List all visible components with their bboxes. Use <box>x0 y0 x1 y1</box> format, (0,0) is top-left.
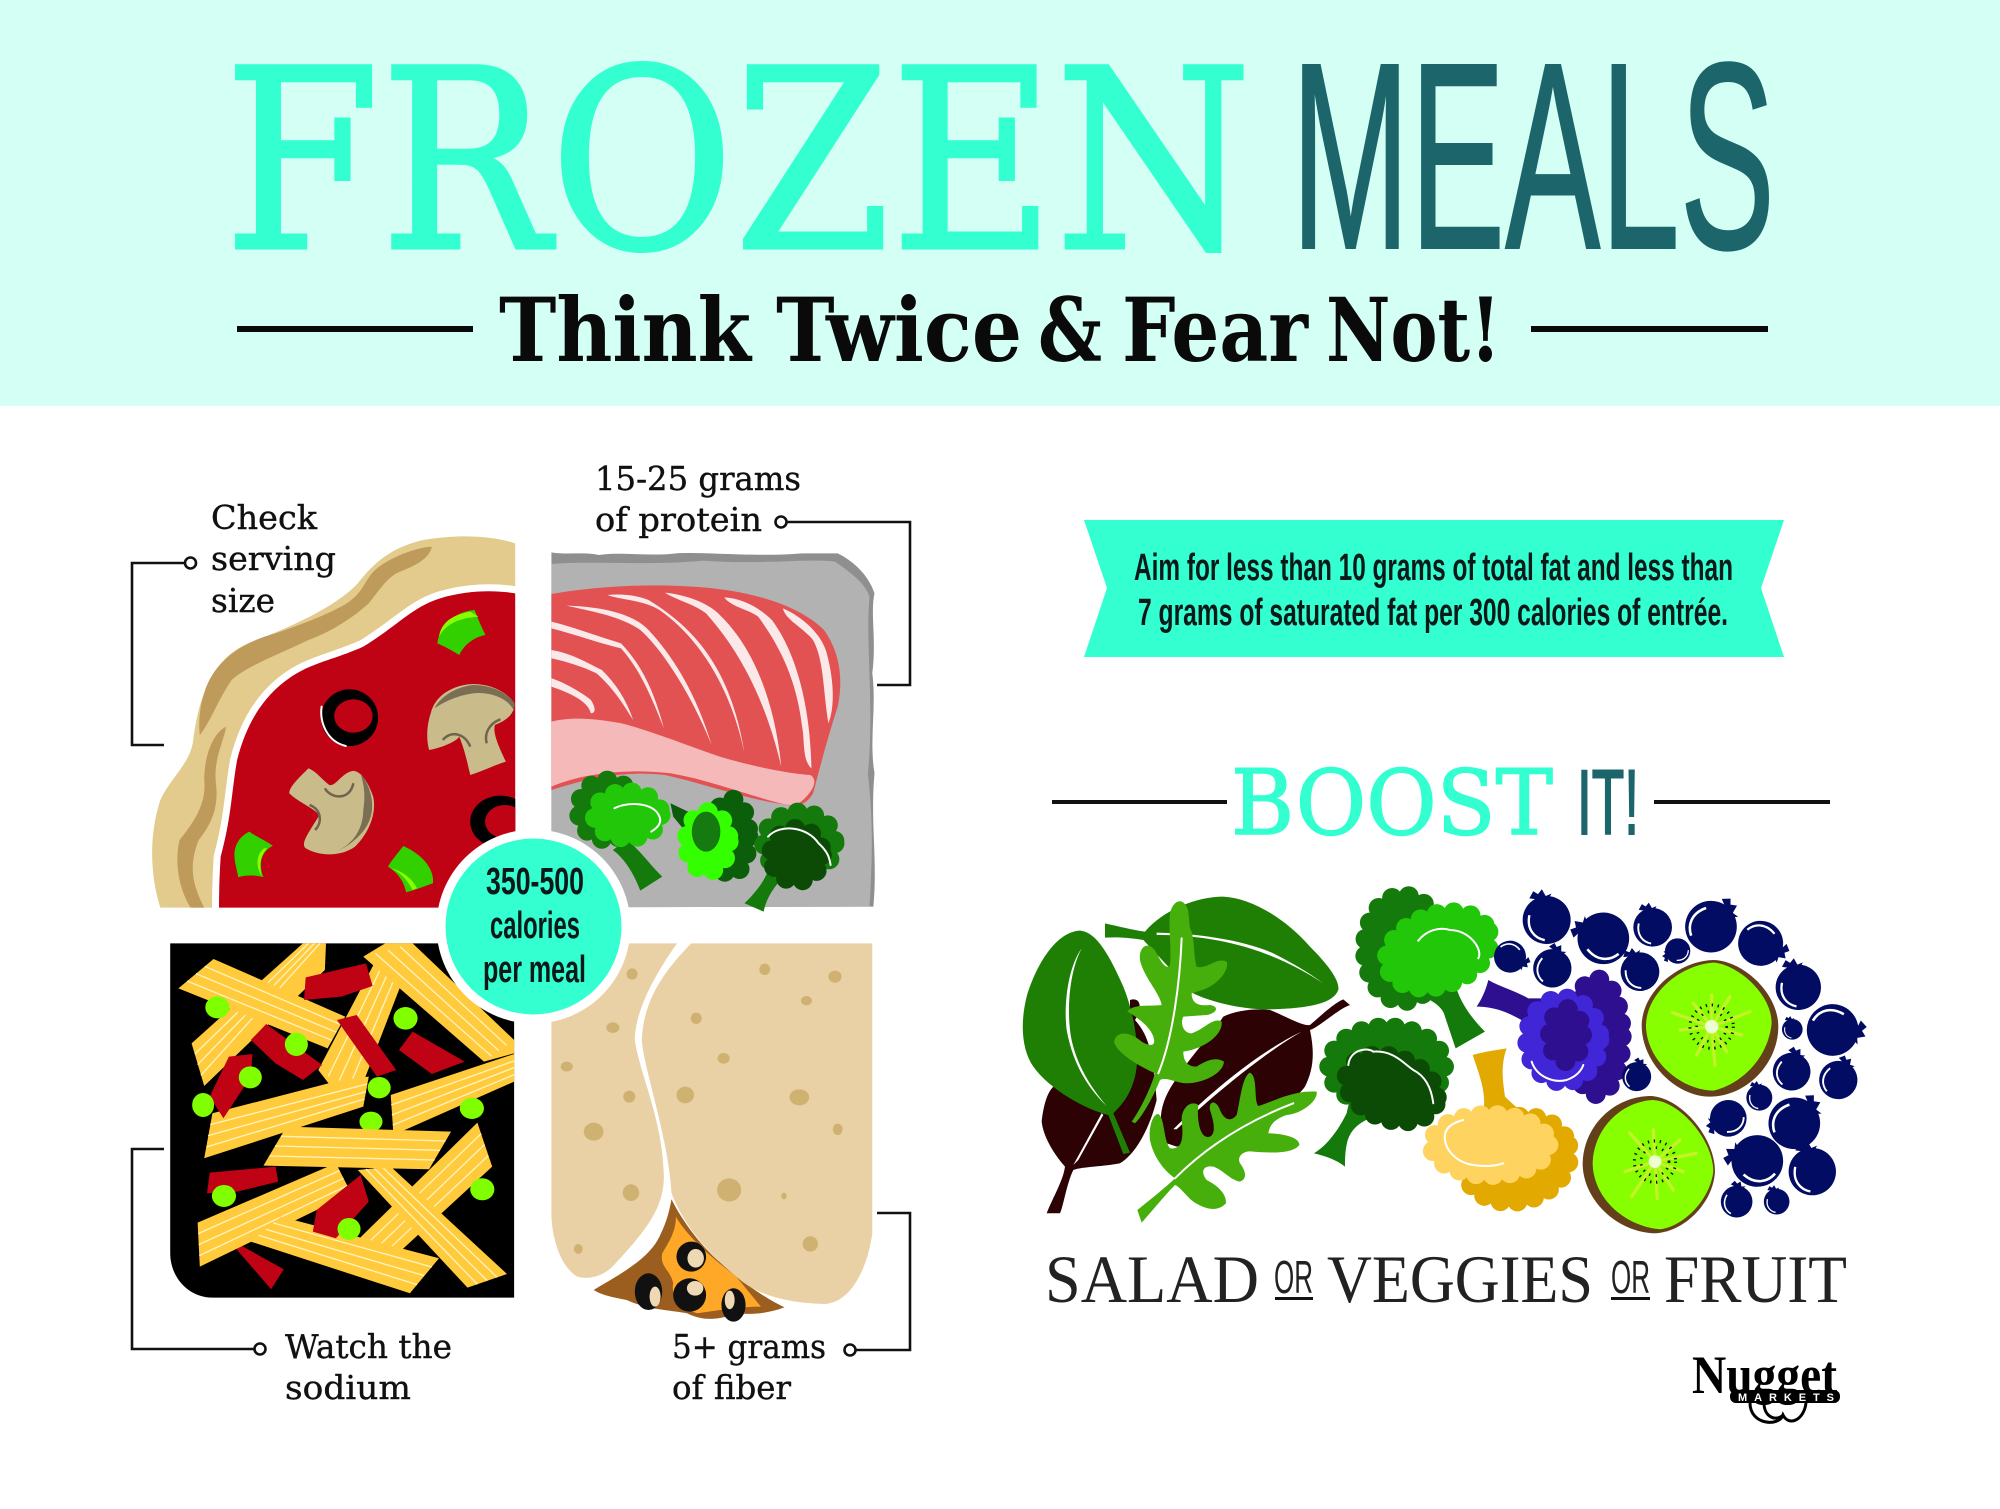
subtitle <box>237 278 1768 382</box>
caption: salad or veggies or fruit: OR <box>1274 1251 1313 1303</box>
panel: salmon on tray <box>551 552 875 912</box>
fat guidance banner <box>1084 520 1784 657</box>
heading: boost it: IT! <box>1577 752 1639 854</box>
salmon stripes <box>551 593 833 768</box>
callout: sodium <box>132 1149 452 1407</box>
callout: serving size: serving <box>211 539 336 578</box>
caption: salad or veggies or fruit: VEGGIES <box>1327 1241 1593 1317</box>
calorie badge: per meal <box>483 949 586 991</box>
olives <box>321 689 531 848</box>
pizza crust <box>152 536 515 908</box>
caption: salad or veggies or fruit: SALAD <box>1045 1241 1259 1317</box>
fruit: blueberries <box>1487 888 1873 1222</box>
veggies: broccoli <box>1314 896 1500 1167</box>
callout: fiber <box>672 1213 910 1407</box>
panel: pizza <box>152 536 531 908</box>
heading: boost it <box>1052 751 1830 856</box>
pepper under pasta <box>237 1243 284 1289</box>
subtitle: & <box>1038 278 1102 382</box>
header band <box>0 0 2000 406</box>
callout: sodium: sodium <box>285 1368 411 1407</box>
burrito filling <box>594 1199 785 1322</box>
callout: serving size <box>132 498 336 745</box>
panel: pasta <box>170 943 514 1298</box>
salmon belly <box>551 719 814 805</box>
caption: salad or veggies or fruit <box>1045 1241 1847 1317</box>
callout: sodium: Watch the <box>285 1327 452 1366</box>
callout: protein: 15-25 grams <box>595 459 801 498</box>
veggies: purple cabbage <box>1477 979 1622 1094</box>
broccoli on tray <box>579 781 834 912</box>
red leaves <box>1042 999 1350 1213</box>
veggies: cauliflower <box>1432 1048 1579 1213</box>
tray <box>551 552 875 907</box>
callout: fiber: 5+ grams <box>672 1327 826 1366</box>
caption: salad or veggies or fruit: FRUIT <box>1664 1241 1847 1317</box>
fruit: kiwi bottom <box>1583 1096 1715 1233</box>
heading: boost it: BOOST <box>1231 751 1553 856</box>
callout: protein: of protein <box>595 500 762 539</box>
pizza sauce <box>219 591 515 908</box>
salmon fillet <box>551 585 840 806</box>
penne group <box>178 943 514 1293</box>
callout: serving size: size <box>211 581 275 620</box>
red peppers <box>207 963 465 1238</box>
tortilla <box>551 943 872 1304</box>
tortilla specks <box>561 964 843 1254</box>
callout: serving size: Check <box>211 498 318 537</box>
subtitle: Not! <box>1326 278 1501 382</box>
subtitle: Fear <box>1122 278 1309 382</box>
tray surface <box>551 561 872 907</box>
subtitle: Think <box>499 278 753 382</box>
calorie badge: 350-500 <box>486 861 584 903</box>
calorie badge: calories <box>490 905 580 947</box>
crust shading <box>177 547 432 908</box>
caption: salad or veggies or fruit: OR <box>1611 1251 1650 1303</box>
subtitle: Twice <box>776 278 1022 382</box>
callout: protein <box>595 459 910 685</box>
fruit: kiwi top <box>1642 960 1778 1097</box>
spinach leaves <box>1023 897 1338 1154</box>
logo: Nugget Markets: Nugget <box>1692 1345 1837 1405</box>
salad leaves <box>1023 897 1350 1223</box>
calorie badge <box>436 830 630 1024</box>
title: FROZEN: FROZEN <box>224 16 1252 307</box>
green peppers <box>234 610 486 892</box>
callout: fiber: of fiber <box>672 1368 791 1407</box>
mushrooms <box>289 684 514 854</box>
logo: Nugget Markets: MARKETS <box>1738 1392 1834 1404</box>
panel: burrito <box>551 943 872 1322</box>
peas <box>192 996 494 1240</box>
pasta tray <box>170 943 514 1298</box>
arugula leaves <box>1114 901 1317 1223</box>
